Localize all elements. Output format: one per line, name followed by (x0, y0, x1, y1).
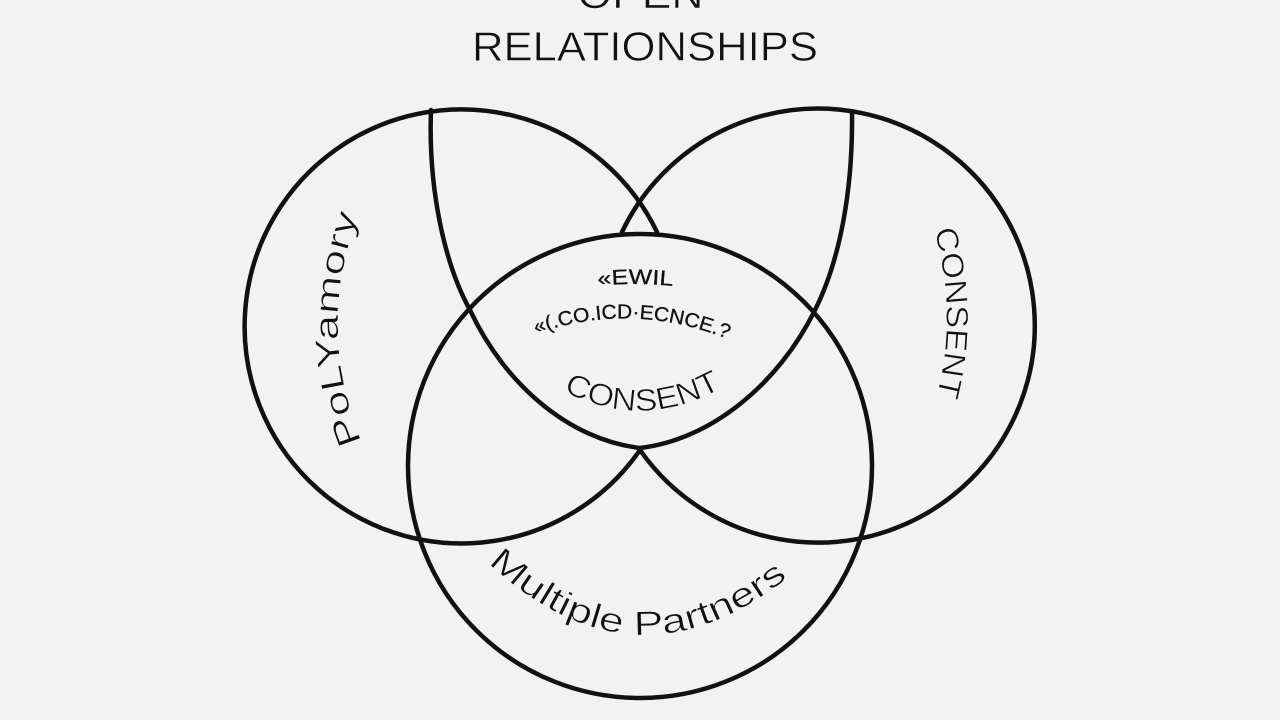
label: garbled top line: «EWIL (598, 269, 672, 286)
label: consent right: CONSENT (937, 229, 968, 400)
bottom circle (408, 234, 872, 698)
right circle (622, 109, 1035, 543)
label: garbled middle line: «(.CO.ICD·ECNCE.? (534, 304, 731, 338)
title (472, 0, 818, 70)
inner curve (431, 110, 852, 448)
label: polyamory: PoLYamory (316, 211, 360, 446)
title: RELATIONSHIPS (472, 24, 818, 70)
label: center consent: CONSENT (568, 370, 714, 411)
venn diagram (245, 109, 1035, 698)
label: multiple partners: Multiple Partners (491, 548, 784, 636)
left circle (245, 109, 657, 543)
